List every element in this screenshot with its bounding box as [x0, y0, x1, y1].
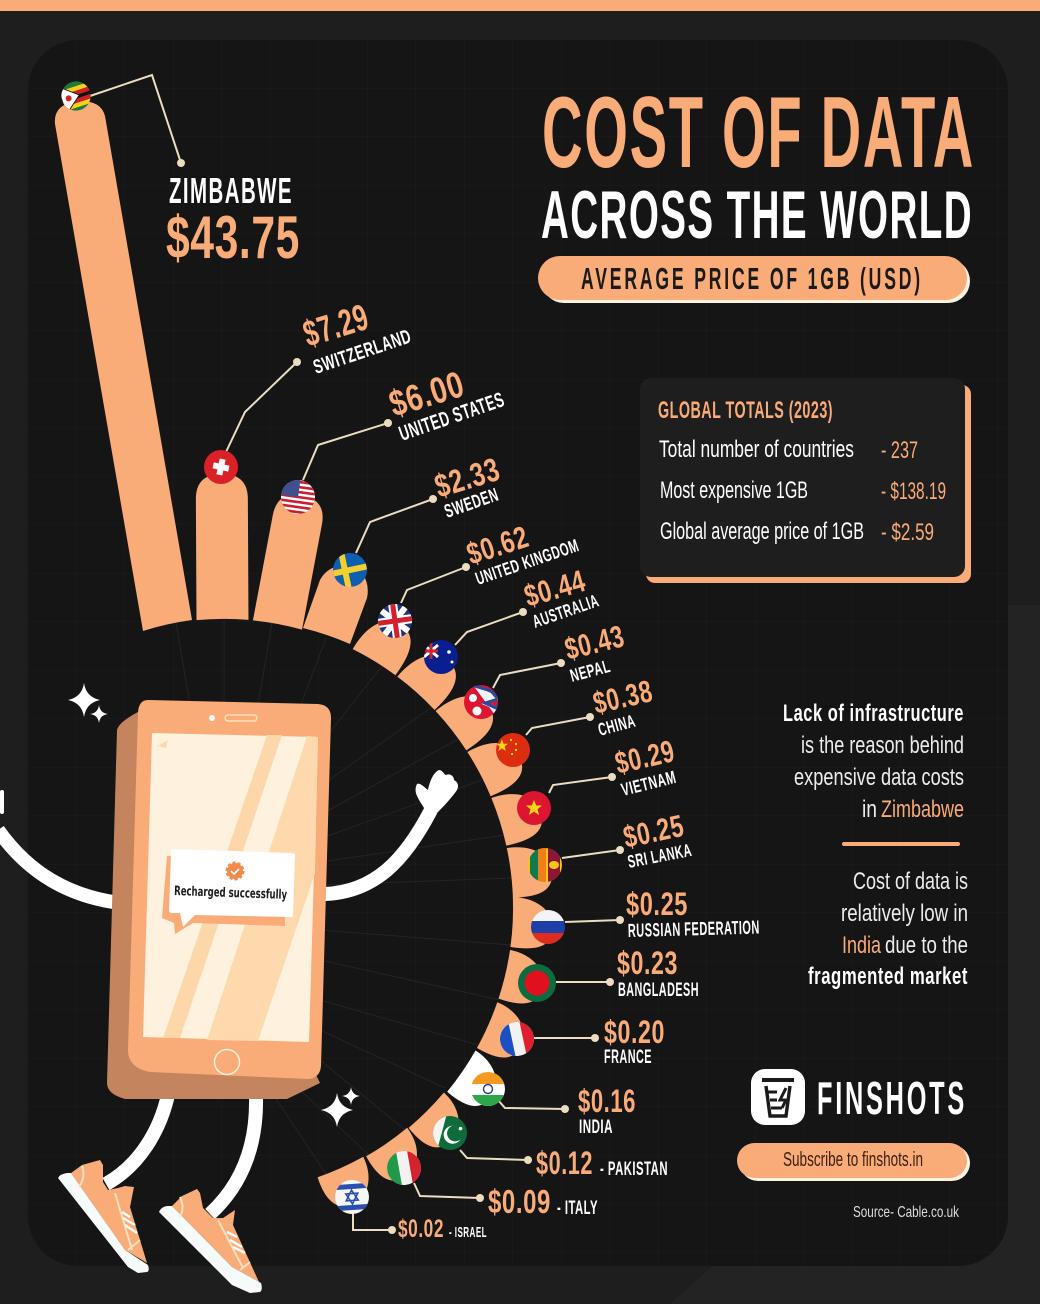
price: Sri Lanka: $0.25 [620, 808, 687, 855]
flag: Pakistan [433, 1116, 467, 1150]
flag: Australia [424, 640, 458, 674]
speaker dot [209, 715, 215, 721]
leader dot: Switzerland [293, 358, 301, 366]
button text: Subscribe to finshots.in [783, 1149, 923, 1171]
flag: China [496, 733, 530, 767]
flag: India [471, 1072, 505, 1107]
text block: Zimbabwe insight [783, 700, 964, 823]
insight line three rest: due to the [885, 932, 968, 959]
finger: Vietnam [491, 785, 548, 846]
finger: Italy [366, 1128, 430, 1189]
country name: Vietnam: VIETNAM [619, 767, 678, 800]
leader dot: Vietnam [608, 773, 616, 781]
finger: Nepal [436, 683, 502, 751]
speaker slot [225, 715, 257, 721]
finger: Zimbabwe [55, 101, 192, 631]
sparkle top [68, 683, 108, 723]
country: Italy [366, 1128, 598, 1220]
text block: India insight [808, 868, 968, 990]
country: Israel [317, 1157, 487, 1243]
leader line: Australia [455, 612, 523, 645]
leader line: France [534, 1037, 595, 1039]
flag: Italy [387, 1151, 421, 1185]
country: Switzerland [196, 296, 414, 620]
price: Bangladesh: $0.23 [617, 945, 678, 981]
country name: China: CHINA [596, 711, 638, 740]
flag: Switzerland [204, 450, 238, 484]
finger: Switzerland [196, 474, 248, 620]
flag: Vietnam [517, 791, 551, 825]
flag: Sweden [333, 553, 367, 587]
leader line: Nepal [493, 663, 561, 688]
country name: Switzerland: SWITZERLAND [311, 326, 414, 379]
leader line: Switzerland [226, 362, 297, 452]
finger: India [447, 1050, 508, 1114]
logo cup icon [762, 1080, 794, 1116]
country: Russian Federation [510, 886, 760, 950]
flag: Israel [335, 1180, 369, 1214]
leader line: United Kingdom [401, 567, 466, 603]
phone side [107, 712, 320, 1099]
panel: global totals [640, 378, 971, 583]
country: United States [253, 363, 508, 630]
finger: Australia [397, 642, 466, 710]
sparkle bottom [321, 1087, 360, 1127]
price: China: $0.38 [590, 673, 656, 721]
row one label: Total number of countries [659, 436, 854, 463]
phone front [128, 700, 331, 1079]
country: Pakistan [408, 1093, 668, 1181]
country: Sweden [303, 450, 504, 644]
flag: Russia [531, 910, 565, 945]
finger: Sweden [303, 566, 368, 644]
leader line: China [526, 717, 590, 735]
country: Nepal [436, 618, 628, 751]
left leg [106, 1095, 168, 1184]
leader line: India [498, 1100, 565, 1109]
notification shadow [162, 856, 285, 934]
leader dot: Israel [388, 1226, 396, 1234]
finger: Sri Lanka [507, 843, 555, 898]
leader dot: Zimbabwe [177, 159, 185, 167]
pill shadow [542, 259, 970, 303]
price: Australia: $0.44 [520, 563, 590, 614]
row three label: Global average price of 1GB [660, 518, 864, 545]
finger: Israel [317, 1157, 379, 1213]
country: Bangladesh [498, 945, 699, 1008]
screen stripe one [163, 735, 282, 1038]
leader line: Pakistan [460, 1150, 528, 1160]
logo tile [751, 1069, 805, 1125]
leader line: Vietnam [549, 777, 612, 793]
price: Israel: $0.02 [398, 1215, 444, 1243]
finger: China [467, 731, 530, 797]
leader dot: United States [384, 419, 392, 427]
button body [737, 1143, 967, 1178]
finger: France [477, 1002, 533, 1064]
country: Sri Lanka [507, 808, 694, 898]
box accent [646, 385, 971, 583]
flag: Bangladesh [518, 964, 556, 1002]
country name: Australia: AUSTRALIA [530, 590, 602, 632]
country name: Zimbabwe: ZIMBABWE [169, 170, 293, 211]
leader dot: Nepal [557, 659, 565, 667]
source credit: Source- Cable.co.uk [853, 1204, 960, 1221]
country: Vietnam [491, 733, 678, 846]
row two value: - $138.19 [881, 478, 946, 505]
price: Zimbabwe: $43.75 [166, 204, 300, 271]
finger: Russia [510, 897, 554, 950]
notification text: Recharged successfully [174, 884, 288, 903]
left hand fragment [0, 790, 4, 814]
leader line: Zimbabwe [90, 75, 181, 163]
screen stripe two [207, 736, 318, 1041]
price: India: $0.16 [578, 1083, 636, 1119]
left shoe [58, 1160, 149, 1273]
flag: France [500, 1022, 534, 1056]
row two label: Most expensive 1GB [660, 477, 808, 504]
right hand [416, 770, 458, 813]
country: France [477, 1002, 665, 1068]
box body [640, 378, 965, 577]
left arm [0, 830, 113, 902]
leader line: Sweden [356, 499, 433, 553]
right arm [325, 810, 431, 894]
row three value: - $2.59 [881, 519, 934, 546]
background faint shape [670, 605, 1040, 1304]
flag: United Kingdom [378, 604, 412, 638]
phone screen [143, 733, 318, 1042]
price: Sweden: $2.33 [430, 450, 504, 505]
country: Australia [397, 563, 602, 710]
country: United Kingdom [353, 519, 582, 676]
insight line one: Lack of infrastructure [783, 700, 964, 727]
box heading: GLOBAL TOTALS (2023) [658, 397, 833, 424]
country name: Sri Lanka: SRI LANKA [626, 840, 694, 872]
leader dot: Australia [519, 608, 527, 616]
insight highlight: India [842, 932, 881, 959]
country: Zimbabwe [55, 75, 300, 631]
insight line three: expensive data costs [794, 764, 964, 791]
country name: Italy: - ITALY [557, 1198, 598, 1219]
flag: United States [281, 480, 315, 514]
leader line: Italy [414, 1183, 480, 1198]
leader dot: China [586, 713, 594, 721]
country name: Russia: RUSSIAN FEDERATION [628, 918, 760, 942]
insight line two: is the reason behind [801, 732, 964, 759]
country name: Israel: - ISRAEL [449, 1224, 487, 1241]
country: India [447, 1050, 636, 1138]
leader dot: Russia [616, 916, 624, 924]
home button [214, 1050, 240, 1074]
price: United States: $6.00 [384, 363, 469, 425]
country: China [467, 673, 656, 797]
leader line: United States [303, 423, 388, 480]
leader dot: Italy [476, 1194, 484, 1202]
finger: Bangladesh [498, 950, 549, 1008]
country name: France: FRANCE [604, 1047, 652, 1068]
leader dot: Pakistan [524, 1156, 532, 1164]
flag: Sri Lanka [528, 848, 562, 882]
subscribe button [737, 1143, 970, 1181]
insight highlight: Zimbabwe [881, 796, 964, 823]
country name: India: INDIA [579, 1117, 613, 1138]
insight line four start: in [862, 796, 877, 823]
price: France: $0.20 [604, 1014, 665, 1050]
flag: Nepal [464, 685, 498, 719]
country name: United Kingdom: UNITED KINGDOM [473, 535, 582, 589]
country name: United States: UNITED STATES [396, 388, 508, 446]
right leg [210, 1097, 256, 1214]
country name: Bangladesh: BANGLADESH [618, 980, 699, 1001]
leader line: Sri Lanka [562, 850, 620, 858]
leader dot: United Kingdom [462, 563, 470, 571]
finger: United States [253, 491, 327, 630]
country name: Pakistan: - PAKISTAN [600, 1159, 668, 1180]
finger: United Kingdom [353, 610, 420, 676]
notification bubble [169, 849, 295, 927]
divider [842, 842, 960, 846]
right shoe [159, 1189, 262, 1293]
flag: Zimbabwe [61, 81, 91, 111]
leader line: Bangladesh [556, 981, 610, 983]
leader dot: Sweden [429, 495, 437, 503]
badge icon [227, 863, 243, 879]
title [541, 77, 975, 253]
price: Vietnam: $0.29 [612, 733, 678, 781]
button shadow [740, 1145, 970, 1181]
leader dot: Sri Lanka [616, 846, 624, 854]
row one value: - 237 [881, 437, 918, 464]
leader dot: Bangladesh [606, 978, 614, 986]
price: Russia: $0.25 [626, 886, 688, 922]
top accent bar [0, 0, 1040, 11]
country name: Sweden: SWEDEN [442, 485, 502, 523]
price: Switzerland: $7.29 [298, 296, 373, 355]
phone character [0, 700, 458, 1293]
price: Nepal: $0.43 [561, 618, 628, 667]
pill body [538, 256, 967, 300]
screen icon [158, 740, 168, 748]
insight line one: Cost of data is [853, 868, 968, 895]
insight line two: relatively low in [841, 900, 968, 927]
logo: Finshots [751, 1069, 967, 1125]
price: United Kingdom: $0.62 [462, 519, 533, 572]
leader dot: India [561, 1105, 569, 1113]
leader line: Israel [353, 1214, 392, 1230]
leader line: Russia [565, 920, 620, 922]
leader dot: France [591, 1034, 599, 1042]
subtitle pill [538, 256, 970, 303]
radial lines behind phone [176, 619, 512, 1180]
price: Pakistan: $0.12 [536, 1145, 593, 1181]
price: Italy: $0.09 [488, 1183, 551, 1220]
insight line four: fragmented market [808, 963, 968, 990]
country name: Nepal: NEPAL [568, 656, 613, 686]
finger: Pakistan [408, 1093, 472, 1156]
